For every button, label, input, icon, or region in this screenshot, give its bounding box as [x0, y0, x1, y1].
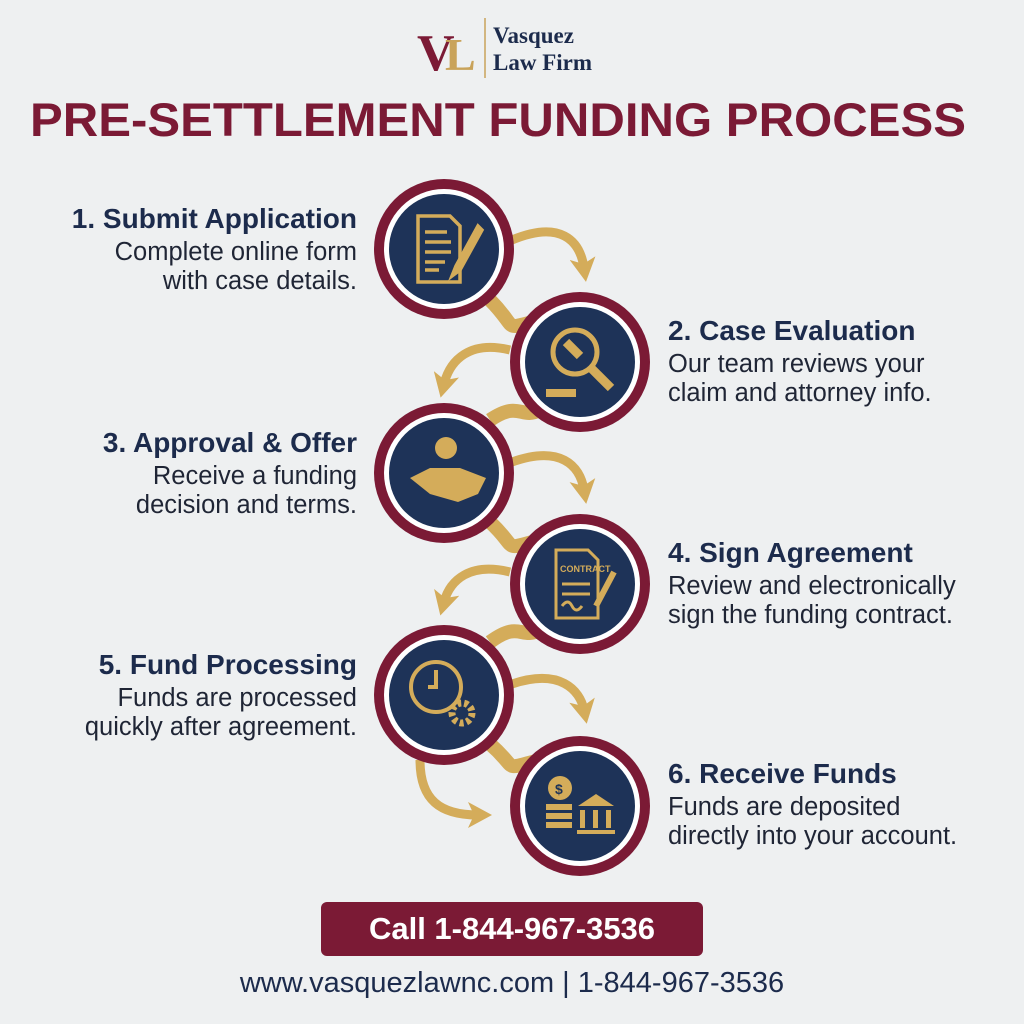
icon: contract [556, 550, 614, 618]
icon: handshake [410, 437, 486, 502]
step 6 text: Funds are deposited [668, 793, 900, 821]
step 3 text: decision and terms. [136, 491, 357, 519]
step 2 text: 2. Case Evaluation [668, 315, 915, 346]
icon: gavel magnifier [546, 330, 611, 393]
step 3 text: Receive a funding [153, 462, 357, 490]
step 1 text: with case details. [163, 267, 357, 295]
logo [417, 18, 592, 78]
process diagram [374, 179, 650, 876]
icon: document [418, 216, 482, 282]
footer contact: www.vasquezlawnc.com | 1-844-967-3536 [240, 967, 784, 999]
step 2 text [668, 315, 932, 407]
step 6 text: directly into your account. [668, 822, 957, 850]
step 5 text [85, 649, 357, 741]
call button: Call 1-844-967-3536 [369, 911, 655, 946]
icon: clock gear [411, 662, 472, 723]
step 1 text: 1. Submit Application [72, 203, 357, 234]
step 4 text: Review and electronically [668, 572, 956, 600]
step 5 text: Funds are processed [117, 684, 357, 712]
step 5 text: quickly after agreement. [85, 713, 357, 741]
icon: coins bank [546, 776, 615, 834]
logo text: Vasquez [493, 23, 574, 48]
step 1 text: Complete online form [115, 238, 357, 266]
icon: contract: CONTRACT [560, 564, 611, 574]
step 4 text: 4. Sign Agreement [668, 537, 913, 568]
connectors [490, 300, 540, 766]
step 5 text: 5. Fund Processing [99, 649, 357, 680]
step 3 text: 3. Approval & Offer [103, 427, 357, 458]
step 4 text [668, 537, 956, 629]
step 6 text [668, 758, 957, 850]
step 1 text [72, 203, 357, 295]
logo text: Law Firm [493, 50, 592, 75]
step 2 text: Our team reviews your [668, 350, 924, 378]
step 4 text: sign the funding contract. [668, 601, 953, 629]
step 3 text [103, 427, 357, 519]
arrows [420, 232, 584, 815]
logo text [493, 23, 592, 75]
step 2 text: claim and attorney info. [668, 379, 932, 407]
call button [321, 902, 703, 956]
icon: VL monogram [417, 25, 476, 82]
step circles [0, 0, 70, 70]
process diagram: $ [555, 781, 563, 797]
step 6 text: 6. Receive Funds [668, 758, 897, 789]
